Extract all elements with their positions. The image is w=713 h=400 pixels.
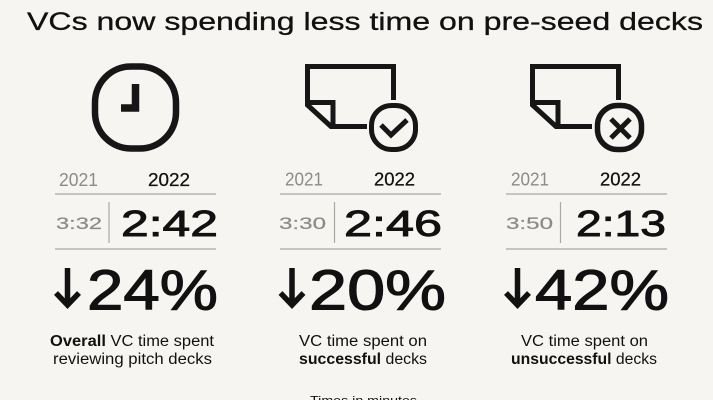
year labels <box>511 170 641 190</box>
icon: document with check <box>308 66 416 150</box>
caption <box>50 333 215 368</box>
caption: unsuccessful decks <box>511 351 657 368</box>
change <box>280 258 446 322</box>
year labels <box>59 170 190 190</box>
time 2022: 2:46 <box>344 203 442 244</box>
caption: VC time spent on <box>521 333 648 350</box>
year labels: 2021 <box>59 170 98 190</box>
panel: overall <box>50 66 218 368</box>
year labels: 2022 <box>374 170 415 190</box>
panel: successful <box>279 66 446 368</box>
arrow: down <box>56 268 79 305</box>
change <box>506 258 669 322</box>
year labels: 2022 <box>600 170 641 190</box>
caption: Overall VC time spent <box>50 333 215 350</box>
year labels: 2021 <box>511 170 549 190</box>
year labels: 2021 <box>285 170 323 190</box>
icon: document with cross <box>532 66 642 150</box>
change: 20% <box>309 258 446 322</box>
icon: clock <box>95 66 176 148</box>
caption: successful decks <box>299 351 427 368</box>
time 2022: 2:13 <box>576 203 666 244</box>
arrow: down <box>506 268 529 305</box>
year labels <box>285 170 415 190</box>
change: 42% <box>535 258 669 322</box>
time 2022: 2:42 <box>121 203 218 244</box>
caption <box>299 333 427 368</box>
caption <box>511 333 657 368</box>
title: VCs now spending less time on pre-seed decks <box>27 8 703 36</box>
panel: unsuccessful <box>506 66 669 368</box>
time 2021: 3:50 <box>506 214 553 233</box>
caption: reviewing pitch decks <box>53 351 212 368</box>
arrow: down <box>280 268 304 305</box>
year labels: 2022 <box>148 170 190 190</box>
time 2021: 3:30 <box>279 214 326 233</box>
change: 24% <box>87 258 218 322</box>
caption: VC time spent on <box>299 333 427 350</box>
time 2021: 3:32 <box>56 214 102 233</box>
